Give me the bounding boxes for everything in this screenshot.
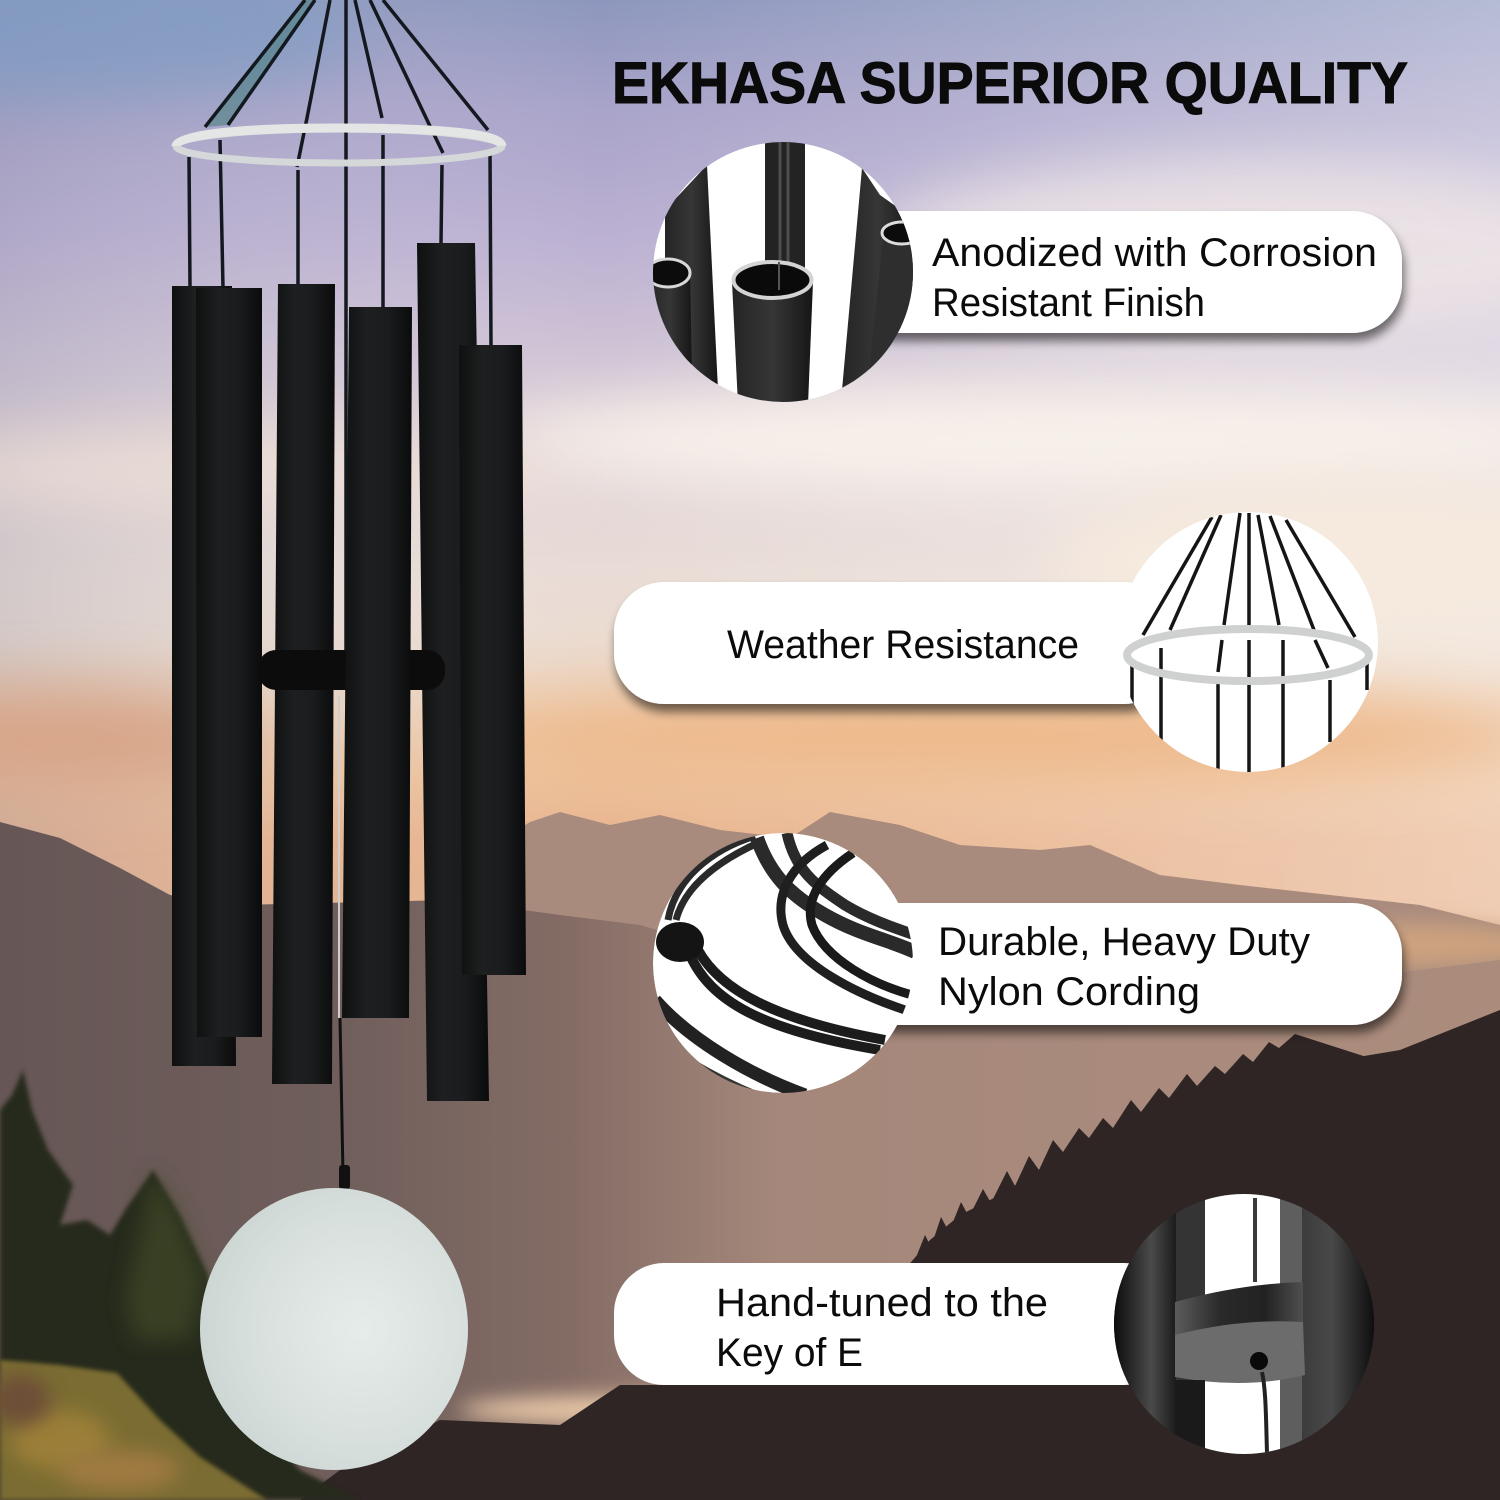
icon: ring and cords xyxy=(1118,512,1378,773)
middle and left mountain xyxy=(0,822,1500,1500)
text: Hand-tuned to the xyxy=(716,1281,1048,1325)
pill xyxy=(780,903,1402,1025)
icon: striker close-up xyxy=(1114,1190,1377,1460)
title: EKHASA SUPERIOR QUALITY xyxy=(612,51,1408,116)
icon: cord close-up xyxy=(653,833,915,1095)
sail ball xyxy=(200,1188,468,1470)
panel: weather resistance xyxy=(614,512,1378,773)
wind catcher cord xyxy=(340,1018,343,1175)
back tubes xyxy=(172,286,236,1066)
hanging cords xyxy=(189,0,491,650)
striker disc xyxy=(258,650,445,690)
text xyxy=(716,1281,1048,1375)
panel: hand-tuned xyxy=(614,1190,1377,1460)
pill xyxy=(614,582,1174,704)
text: Nylon Cording xyxy=(938,970,1200,1014)
forested ridge right xyxy=(300,1010,1500,1500)
text: Key of E xyxy=(716,1331,863,1375)
text: Weather Resistance xyxy=(727,623,1079,667)
forest and grassy slope left xyxy=(0,1070,360,1500)
far mountain range xyxy=(500,812,1500,1500)
product: wind chime xyxy=(172,0,526,1470)
text: Resistant Finish xyxy=(932,281,1205,325)
pill xyxy=(614,1263,1174,1385)
panel: nylon cording xyxy=(653,833,1402,1095)
icon: tube close-up xyxy=(646,140,922,405)
text xyxy=(932,231,1377,325)
text: Durable, Heavy Duty xyxy=(938,920,1310,964)
pill xyxy=(780,211,1402,333)
front tubes xyxy=(196,288,262,1037)
panel: anodized finish xyxy=(646,140,1402,405)
silver ring xyxy=(176,128,502,163)
text: Anodized with Corrosion xyxy=(932,231,1377,275)
text xyxy=(938,920,1310,1014)
